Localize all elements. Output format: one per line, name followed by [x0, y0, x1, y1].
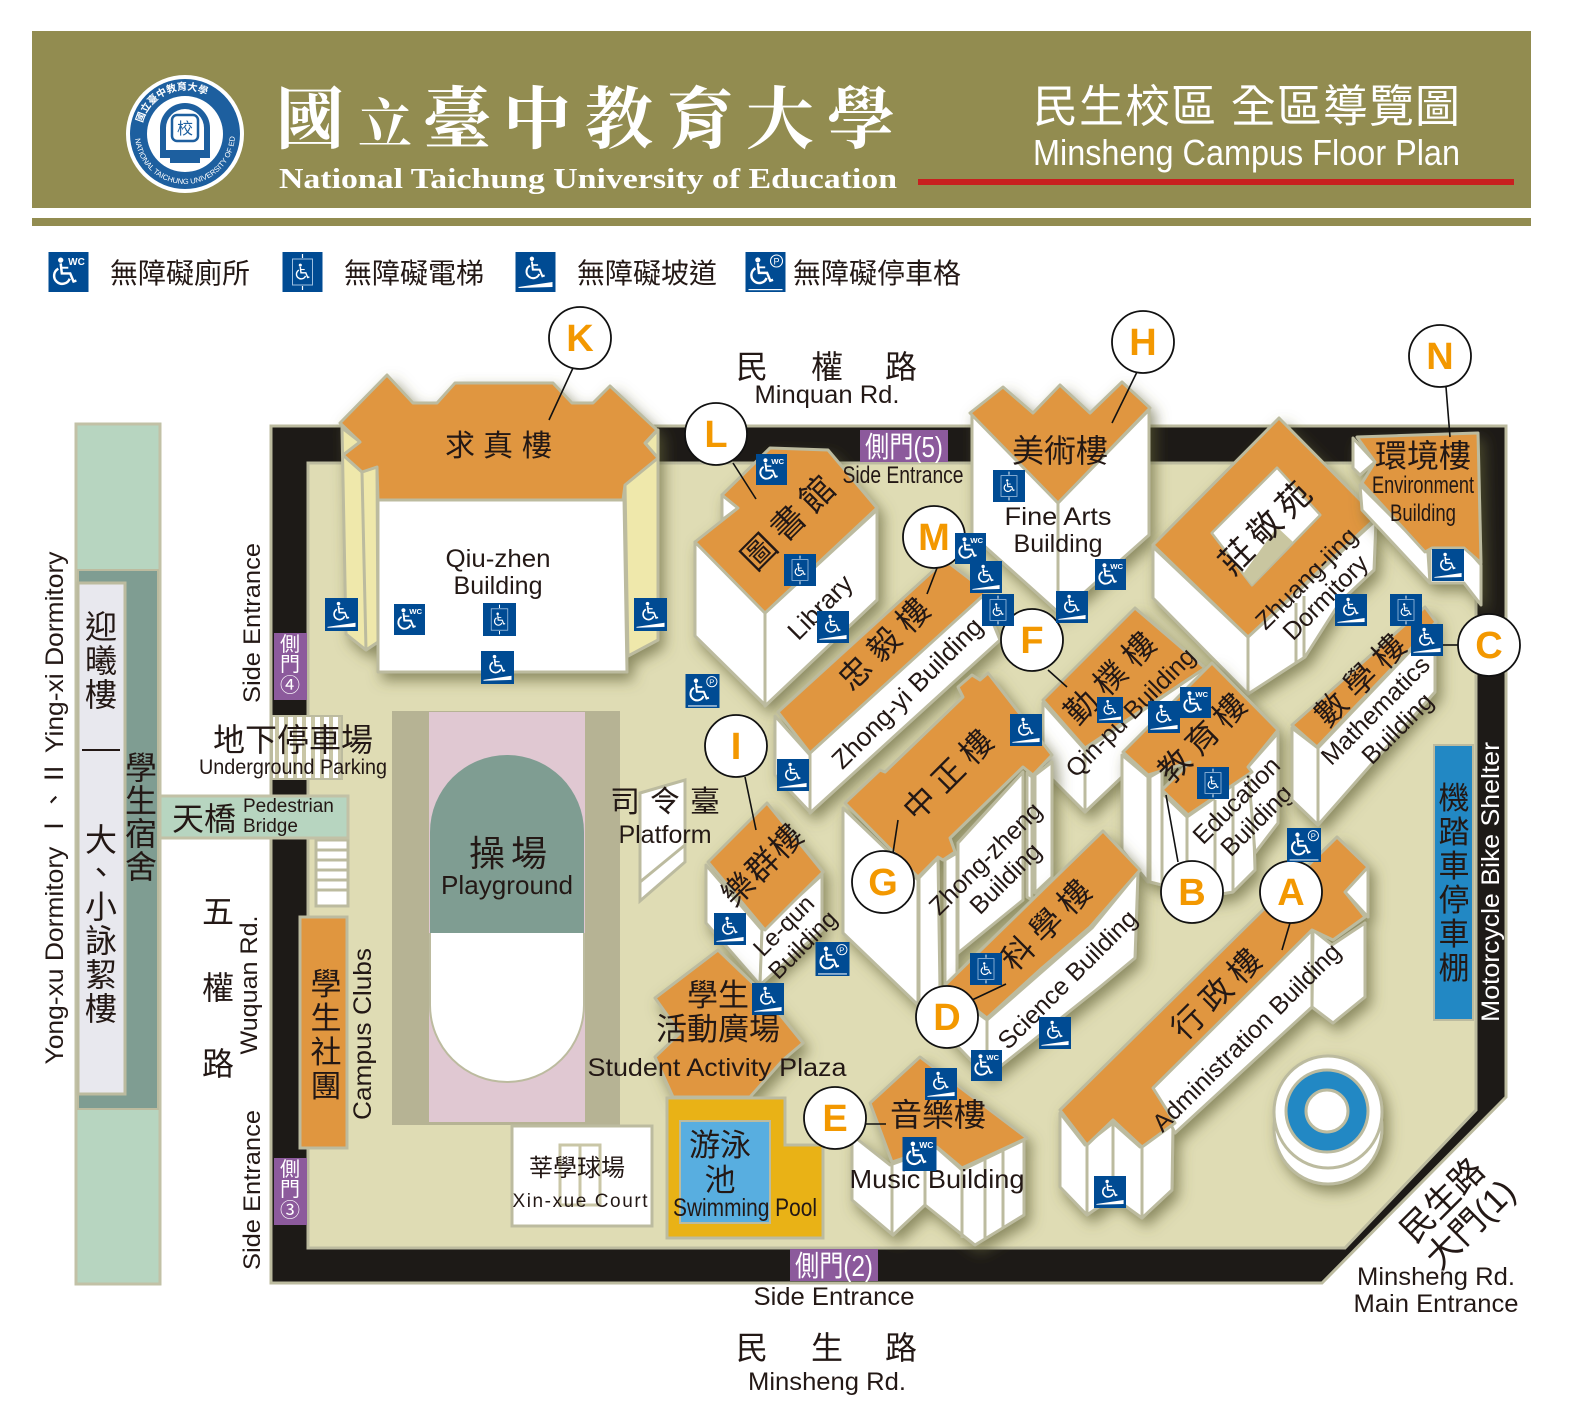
icon: ramp, Le-qun — [714, 913, 746, 945]
building: Library — [695, 448, 877, 706]
platform — [610, 780, 720, 901]
motorcycle bike shelter: Motorcycle Bike Shelter — [1477, 742, 1505, 1022]
icon: elevator, Zhong-yi — [982, 594, 1014, 626]
icon: ramp, Zhong-yi west — [777, 759, 809, 791]
campus clubs building: 學 — [310, 967, 342, 1002]
university logo: 國立臺中教育大學 — [134, 82, 208, 123]
campus clubs building: 生 — [310, 1001, 342, 1036]
legend: accessible parking: 無障礙停車格 — [793, 258, 961, 289]
minquan road label — [736, 349, 917, 409]
dorm name: Yong-xu: 大 — [85, 822, 117, 858]
legend: accessible elevator: 無障礙電梯 — [344, 258, 484, 289]
callout L — [685, 403, 756, 499]
callout B: B — [1178, 872, 1206, 914]
building: Zhong-zheng: Zhong-zheng — [924, 797, 1048, 921]
building: Mathematics: Building — [1356, 687, 1439, 770]
xin-xue court: 莘學球場 — [529, 1155, 625, 1182]
wuquan road label: 路 — [202, 1046, 234, 1082]
wuquan road label — [202, 894, 263, 1082]
callout M: M — [918, 517, 950, 559]
building: Fine Arts: Fine Arts — [1004, 503, 1112, 531]
campus clubs building: 團 — [310, 1069, 342, 1104]
stairs under bridge — [316, 840, 348, 906]
main entrance label — [1354, 1151, 1523, 1318]
building: Fine Arts: Building — [1014, 530, 1102, 558]
title: university name chinese: 大 — [746, 66, 814, 163]
building: Zhuang-jing Dormitory: Dormitory — [1278, 549, 1374, 646]
side gate 3: 門 — [280, 1179, 300, 1201]
callout K — [549, 307, 611, 420]
playground — [392, 711, 620, 1125]
motorcycle bike shelter: 棚 — [1438, 951, 1470, 986]
building: Zhong-zheng: Building — [964, 837, 1047, 920]
red rule — [918, 179, 1514, 185]
callout N: N — [1426, 336, 1454, 378]
side entrance label 3: Side Entrance — [239, 1110, 266, 1270]
legend: accessible toilet: 無障礙廁所 — [110, 258, 250, 289]
callout D — [916, 984, 1006, 1048]
callout H — [1112, 311, 1174, 423]
building: Mathematics: Mathematics — [1316, 651, 1436, 771]
dorm name: Yong-xu: 小 — [85, 889, 117, 925]
platform: 令 — [650, 786, 680, 819]
platform: 臺 — [690, 786, 720, 819]
xin-xue court — [512, 1126, 652, 1226]
callout B — [1161, 795, 1223, 923]
icon: ramp, Zhong-yi — [970, 561, 1002, 593]
building: Zhong-zheng: 中正樓 — [896, 717, 1006, 828]
icon: ramp, Zhuang-jing — [1335, 594, 1367, 626]
minquan road label: 路 — [885, 349, 917, 385]
building: Zhuang-jing Dormitory — [1153, 418, 1377, 694]
icon: toilet, Music — [902, 1137, 936, 1171]
title: map name english: Minsheng Campus Floor Plan — [1033, 132, 1460, 173]
callout K: K — [566, 318, 594, 360]
building: Environment — [1353, 433, 1481, 605]
icon: elevator, Library — [784, 554, 816, 586]
building: Le-qun: 樂群樓 — [714, 816, 812, 913]
icon: ramp, Education — [1148, 701, 1180, 733]
icon: ramp, Mathematics — [1411, 624, 1443, 656]
title: university name chinese: 中 — [503, 66, 571, 163]
minquan road label: 權 — [811, 349, 843, 385]
motorcycle bike shelter: 停 — [1438, 883, 1470, 918]
swimming pool: 游泳 — [689, 1128, 751, 1163]
side gate 4: ④ — [280, 674, 300, 697]
callout C: C — [1475, 625, 1503, 667]
building: Science: Science Building — [992, 904, 1143, 1055]
icon: ramp, Environment — [1432, 549, 1464, 581]
fountain — [1274, 1056, 1382, 1184]
playground: 操 — [469, 833, 505, 874]
callout G: G — [868, 862, 898, 904]
icon: ramp, Science — [1039, 1017, 1071, 1049]
main entrance label: Main Entrance — [1354, 1290, 1518, 1318]
building: Qin-pu: 勤樸樓 — [1057, 619, 1170, 731]
xin-xue court: Xin-xue Court — [512, 1191, 648, 1212]
callout A — [1260, 861, 1322, 950]
icon: ramp, Fine Arts — [1056, 591, 1088, 623]
building: Qiu-zhen: 真 — [483, 430, 513, 463]
motorcycle bike shelter: 車 — [1438, 917, 1470, 952]
legend: accessible parking — [746, 252, 961, 292]
callout I: I — [731, 726, 741, 768]
playground: 場 — [511, 833, 547, 874]
building: Education: Building — [1215, 779, 1298, 862]
dorm english label: Yong-xu Dormitory Ⅰ、Ⅱ Ying-xi Dormitory — [41, 551, 69, 1064]
student dormitory label: 宿 — [125, 816, 157, 852]
student activity plaza — [588, 950, 847, 1097]
platform: Platform — [618, 821, 712, 849]
icon: toilet, Zhong-yi — [955, 533, 986, 564]
platform: 司 — [610, 786, 640, 819]
building: Fine Arts: 美術樓 — [1012, 433, 1108, 469]
building: Le-qun — [706, 803, 843, 985]
icon: parking, Le-qun — [816, 942, 850, 976]
motorcycle bike shelter: 踏 — [1438, 815, 1470, 850]
title: university name chinese: 臺 — [423, 66, 491, 163]
university logo: 校 — [177, 120, 193, 138]
callout N — [1409, 325, 1471, 437]
legend: accessible ramp: 無障礙坡道 — [577, 258, 717, 289]
building: Zhong-yi: Zhong-yi Building — [825, 611, 989, 775]
building: Zhong-zheng — [843, 673, 1052, 1005]
main entrance label: 民生路 — [1393, 1151, 1492, 1250]
side gate 3: ③ — [280, 1199, 300, 1222]
side gate 3: 側 — [280, 1158, 300, 1181]
title: university name chinese: 國 — [276, 66, 344, 163]
motorcycle bike shelter — [1434, 742, 1505, 1022]
building: Mathematics: 數學樓 — [1307, 621, 1420, 733]
dorm name: Ying-xi: 迎 — [85, 609, 117, 645]
icon: elevator, Qiu-zhen — [483, 603, 516, 636]
callout M — [903, 506, 965, 594]
building: Education — [1122, 663, 1298, 900]
icon: elevator, Education — [1197, 767, 1229, 799]
callout F: F — [1020, 620, 1044, 662]
campus clubs building: Campus Clubs — [349, 948, 377, 1120]
building: Environment: 環境樓 — [1375, 438, 1471, 474]
main entrance label: 大門(1) — [1419, 1173, 1523, 1277]
side gate 4: 側 — [280, 633, 300, 656]
callout G — [852, 820, 914, 913]
pedestrian bridge: 天橋 — [172, 801, 236, 837]
building: Fine Arts — [970, 382, 1150, 612]
icon: toilet, Library — [756, 454, 787, 485]
student activity plaza: Student Activity Plaza — [588, 1054, 847, 1082]
building: Qiu-zhen: Qiu-zhen — [446, 545, 550, 573]
building: Science — [942, 831, 1143, 1077]
building: Environment: Environment — [1372, 472, 1474, 499]
motorcycle bike shelter: 機 — [1438, 781, 1470, 816]
building: Music: 音樂樓 — [890, 1097, 986, 1133]
building: Zhong-yi — [775, 560, 1000, 813]
building: Library: Library — [781, 568, 859, 646]
wuquan road label: 五 — [202, 894, 234, 930]
building: Music: Music Building — [850, 1164, 1024, 1194]
icon: ramp, Library — [817, 611, 849, 643]
building: Qin-pu: Qin-pu Building — [1060, 642, 1201, 783]
building: Zhuang-jing Dormitory: 莊敬苑 — [1212, 471, 1324, 582]
title: map name chinese: 民生校區 全區導覽圖 — [1033, 81, 1460, 132]
title: university name chinese: 教 — [585, 66, 653, 163]
minsheng road label: 路 — [885, 1330, 917, 1366]
dorm name: Yong-xu: 樓 — [85, 991, 117, 1027]
campus clubs building — [300, 917, 377, 1148]
building: Qin-pu — [1043, 608, 1205, 812]
building: Mathematics — [1292, 607, 1439, 825]
student dormitory label: 生 — [125, 783, 157, 819]
wuquan road label: Wuquan Rd. — [236, 916, 263, 1054]
dorm name: Ying-xi: 樓 — [85, 677, 117, 713]
student activity plaza: 活動廣場 — [656, 1012, 780, 1047]
pedestrian bridge — [160, 796, 348, 838]
underground parking — [199, 716, 387, 779]
playground: Playground — [441, 870, 573, 900]
title: university name chinese: 學 — [826, 66, 895, 163]
icon: elevator, Science — [970, 953, 1002, 985]
swimming pool: Swimming Pool — [673, 1194, 817, 1222]
wuquan road label: 權 — [202, 970, 234, 1006]
building: Science: 科學樓 — [994, 867, 1104, 978]
callout C — [1443, 614, 1520, 676]
callout L: L — [704, 414, 728, 456]
minsheng road label — [736, 1330, 917, 1396]
minsheng road label: 民 — [736, 1330, 768, 1366]
student activity plaza: 學生 — [687, 978, 749, 1013]
title: university name english: National Taichung University of Education — [279, 163, 897, 195]
icon: toilet, Fine Arts — [1095, 559, 1126, 590]
side entrance label 2: Side Entrance — [754, 1283, 914, 1311]
callout F — [1001, 609, 1067, 687]
building: Education: Education — [1187, 751, 1286, 850]
icon: toilet, Qiu-zhen — [394, 604, 425, 635]
icon: toilet, Education — [1180, 687, 1211, 718]
icon: parking, central — [686, 674, 720, 708]
legend: accessible elevator — [282, 252, 484, 292]
dorm name: Ying-xi: 曦 — [85, 643, 117, 679]
icon: ramp, plaza — [752, 983, 784, 1015]
swimming pool: 池 — [704, 1163, 736, 1198]
callout I — [705, 715, 767, 830]
side gate 3 — [274, 1158, 307, 1225]
legend: accessible toilet — [48, 252, 250, 292]
swimming pool — [667, 1098, 823, 1238]
side entrance label 4: Side Entrance — [239, 543, 266, 703]
accessibility icons on map — [325, 454, 1464, 1208]
icon: ramp, Qiu-zhen west — [325, 598, 358, 631]
pedestrian bridge: Bridge — [243, 816, 298, 837]
title: university name chinese: 立 — [358, 82, 412, 159]
icon: ramp, Qin-pu — [1097, 697, 1123, 723]
dorm name: Yong-xu: 、 — [85, 855, 117, 891]
header banner — [32, 31, 1531, 226]
icon: ramp, Music — [925, 1068, 957, 1100]
building: Qiu-zhen: 樓 — [522, 430, 552, 463]
building: Le-qun: Le-qun — [748, 890, 820, 962]
side gate 4 — [274, 633, 307, 700]
university logo — [126, 75, 244, 193]
building: Administration: Administration Building — [1147, 938, 1347, 1138]
icon: ramp, Qiu-zhen south — [481, 651, 514, 684]
dorm name: Yong-xu: 詠 — [85, 923, 117, 959]
icon: elevator, Fine Arts — [993, 470, 1025, 502]
motorcycle bike shelter: 車 — [1438, 849, 1470, 884]
building: Administration — [1060, 837, 1368, 1218]
icon: elevator, Mathematics — [1390, 594, 1422, 626]
minsheng road label: 生 — [811, 1330, 843, 1366]
icon: toilet, Science — [971, 1050, 1002, 1081]
icon: ramp, Zhong-zheng — [1010, 714, 1042, 746]
building: Zhuang-jing Dormitory: Zhuang-jing — [1250, 522, 1363, 635]
student dormitory label: 舍 — [125, 849, 157, 885]
minquan road label: Minquan Rd. — [754, 381, 900, 409]
callout E — [804, 1087, 886, 1149]
building: Library: 圖書館 — [734, 464, 848, 578]
building: Administration: 行政樓 — [1164, 936, 1274, 1047]
callout E: E — [822, 1098, 848, 1140]
building: Music — [850, 1057, 1027, 1245]
callout A: A — [1277, 872, 1305, 914]
campus clubs building: 社 — [310, 1035, 342, 1070]
building: Le-qun: Building — [763, 905, 843, 985]
building: Environment: Building — [1390, 500, 1456, 527]
dorm name: Yong-xu: 絜 — [85, 957, 117, 993]
building: Qiu-zhen — [340, 375, 658, 672]
minquan road label: 民 — [736, 349, 768, 385]
pedestrian bridge: Pedestrian — [243, 796, 334, 817]
building: Education: 教育樓 — [1151, 682, 1259, 790]
icon: parking, Administration — [1287, 828, 1321, 862]
icon: ramp, Qiu-zhen east — [634, 598, 667, 631]
underground parking: 地下停車場 — [213, 722, 373, 758]
side entrance label 5: Side Entrance — [842, 462, 964, 489]
side gate 5: 側門(5) — [865, 431, 943, 464]
callout H: H — [1129, 322, 1157, 364]
campus wall and grounds — [271, 426, 1506, 1283]
icon: ramp, Administration — [1094, 1176, 1126, 1208]
title: university name chinese: 育 — [666, 66, 734, 163]
building: Qiu-zhen: 求 — [445, 430, 475, 463]
main entrance label: Minsheng Rd. — [1357, 1263, 1515, 1291]
legend: accessible ramp — [516, 252, 717, 292]
side gate 2: 側門(2) — [795, 1250, 873, 1283]
minsheng road label: Minsheng Rd. — [748, 1368, 906, 1396]
underground parking: Underground Parking — [199, 756, 387, 779]
legend — [48, 252, 961, 292]
dormitory strip — [41, 424, 160, 1284]
student dormitory label: 學 — [125, 750, 157, 786]
building: Zhong-yi: 忠毅樓 — [831, 585, 944, 697]
callout D: D — [933, 997, 961, 1039]
side gate 4: 門 — [280, 654, 300, 676]
building: Qiu-zhen: Building — [454, 572, 542, 600]
